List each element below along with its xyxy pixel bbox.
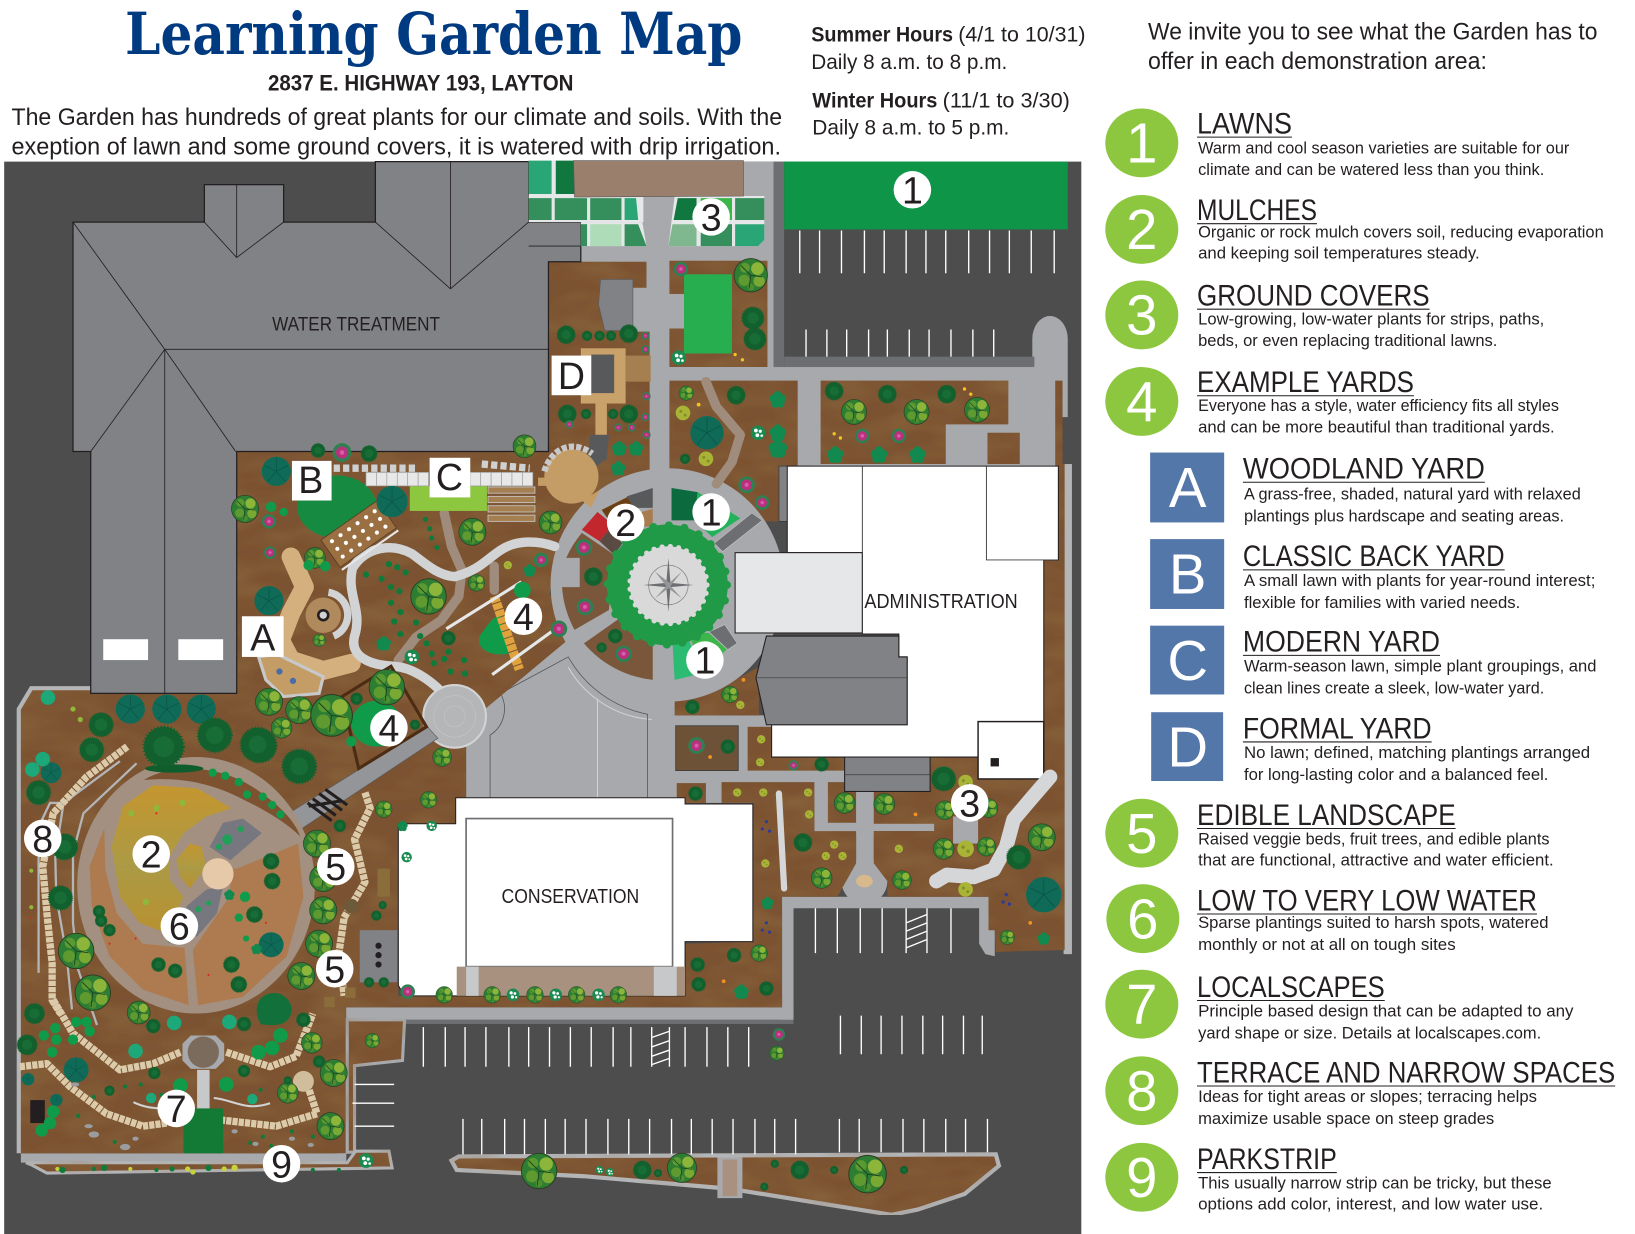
legend item: formal yard bbox=[1151, 712, 1590, 784]
legend item: lawns: 1 bbox=[1126, 112, 1157, 175]
legend item: parkstrip bbox=[1105, 1143, 1552, 1214]
map markers: numbers: 1 bbox=[902, 169, 923, 211]
map markers: numbers: 3 bbox=[701, 196, 722, 238]
map markers: numbers: 5 bbox=[324, 948, 345, 990]
plants: spiral garden surroundings bbox=[25, 690, 627, 1023]
hedge bbox=[145, 764, 203, 773]
building: administration: ADMINISTRATION bbox=[864, 591, 1018, 613]
map markers: numbers: 4 bbox=[513, 596, 534, 638]
map markers: numbers: 4 bbox=[379, 707, 399, 749]
stone edging bbox=[334, 464, 530, 468]
legend item: parkstrip: PARKSTRIP bbox=[1197, 1144, 1337, 1176]
winter hours: Daily 8 a.m. to 5 p.m. bbox=[812, 117, 1009, 140]
legend item: terrace and narrow spaces: 8 bbox=[1126, 1060, 1157, 1123]
yard 4 lawn and deck bbox=[342, 582, 553, 769]
map markers: numbers: 2 bbox=[141, 834, 162, 876]
map markers: letters bbox=[242, 355, 591, 659]
gray service block bbox=[324, 869, 397, 1007]
legend item: lawns bbox=[1105, 108, 1570, 179]
map panel bbox=[4, 161, 1081, 1234]
map markers: numbers: 7 bbox=[166, 1088, 187, 1130]
building: administration bbox=[735, 466, 1058, 791]
green ring bbox=[607, 525, 728, 645]
plaza lawns bbox=[672, 488, 740, 680]
legend item: parkstrip: options add color, interest, and low water use. bbox=[1198, 1196, 1543, 1214]
legend item: low water: monthly or not at all on tough sites bbox=[1198, 936, 1456, 954]
legend item: classic back yard: CLASSIC BACK YARD bbox=[1243, 541, 1505, 573]
summer hours: Summer Hours bbox=[811, 24, 953, 47]
gazebo localscape bbox=[30, 1035, 270, 1153]
legend item: low water: 6 bbox=[1127, 887, 1158, 950]
map markers: numbers: 5 bbox=[325, 846, 346, 888]
parking lines bbox=[352, 230, 1054, 1154]
building: conservation: CONSERVATION bbox=[502, 886, 639, 908]
plaza steps bbox=[709, 513, 762, 650]
map background: asphalt bbox=[4, 162, 1081, 1234]
stone paths bbox=[20, 747, 370, 1126]
legend item: woodland yard: WOODLAND YARD bbox=[1243, 454, 1485, 486]
plaza beds bbox=[562, 533, 653, 680]
legend item: localscapes: 7 bbox=[1126, 973, 1157, 1036]
legend item: mulches: MULCHES bbox=[1197, 195, 1317, 227]
legend item: mulches bbox=[1105, 195, 1604, 264]
address: 2837 E. HIGHWAY 193, LAYTON bbox=[268, 71, 574, 96]
map markers: numbers: 1 bbox=[694, 640, 715, 682]
map markers: numbers: 8 bbox=[32, 818, 53, 860]
plants: yard gardens bbox=[231, 325, 651, 783]
legend item: low water: LOW TO VERY LOW WATER bbox=[1197, 885, 1537, 917]
legend item: parkstrip: This usually narrow strip can be tricky, but these bbox=[1198, 1175, 1552, 1193]
compass rose bbox=[630, 546, 707, 624]
legend item: lawns: climate and can be watered less than you think. bbox=[1198, 161, 1544, 179]
paver circle bbox=[423, 685, 486, 748]
legend item: mulches: 2 bbox=[1126, 198, 1157, 261]
intro paragraph bbox=[11, 104, 782, 160]
legend item: example yards: and can be more beautiful than traditional yards. bbox=[1198, 419, 1555, 437]
building: water treatment bbox=[73, 162, 581, 693]
north lawn panel bbox=[684, 274, 732, 353]
legend item: woodland yard: A grass-free, shaded, natural yard with relaxed bbox=[1244, 485, 1581, 503]
gravel beds bbox=[210, 819, 262, 860]
pump house bbox=[599, 279, 633, 331]
legend item: edible landscape: that are functional, attractive and water efficient. bbox=[1198, 851, 1554, 869]
courtyard detail lines bbox=[568, 667, 652, 798]
legend item: edible landscape: EDIBLE LANDSCAPE bbox=[1197, 800, 1456, 832]
building: water treatment: WATER TREATMENT bbox=[272, 314, 440, 336]
yard A bbox=[259, 592, 348, 697]
map markers: numbers bbox=[24, 169, 989, 1185]
legend item: parkstrip: 9 bbox=[1126, 1146, 1157, 1209]
legend item: classic back yard: flexible for families with varied needs. bbox=[1244, 594, 1520, 612]
top crescent bed bbox=[144, 769, 300, 836]
map markers: letters: D bbox=[558, 355, 585, 397]
center paver bbox=[202, 858, 234, 889]
legend intro: We invite you to see what the Garden has to bbox=[1148, 19, 1597, 46]
legend item: localscapes: LOCALSCAPES bbox=[1197, 972, 1385, 1004]
legend item: localscapes bbox=[1105, 970, 1574, 1043]
legend item: terrace and narrow spaces bbox=[1105, 1056, 1615, 1128]
plants: localscape and parkstrip bbox=[17, 993, 908, 1193]
title: Learning Garden Map bbox=[125, 0, 742, 68]
legend item: modern yard: clean lines create a sleek, low-water yard. bbox=[1244, 679, 1544, 697]
plants: north and east beds bbox=[672, 259, 1061, 999]
winter hours: Winter Hours bbox=[812, 89, 937, 112]
legend item: modern yard: MODERN YARD bbox=[1243, 627, 1440, 659]
building: conservation bbox=[398, 798, 753, 996]
legend item: example yards: Everyone has a style, water efficiency fits all styles bbox=[1198, 397, 1559, 415]
map markers: letters: B bbox=[298, 459, 323, 501]
median crosswalk bbox=[717, 1157, 742, 1198]
map markers: numbers: 1 bbox=[701, 492, 722, 534]
spiral garden bbox=[77, 757, 315, 1014]
legend item: low water bbox=[1106, 884, 1548, 954]
legend item: edible landscape: 5 bbox=[1126, 802, 1157, 865]
intro paragraph: The Garden has hundreds of great plants for our climate and soils. With the bbox=[11, 104, 782, 131]
legend item: lawns: LAWNS bbox=[1197, 108, 1292, 140]
plaza bbox=[551, 468, 784, 702]
map markers: letters: A bbox=[250, 617, 275, 659]
legend item: woodland yard: plantings plus hardscape and seating areas. bbox=[1244, 507, 1564, 525]
legend item: woodland yard bbox=[1150, 453, 1581, 525]
summer hours: Daily 8 a.m. to 8 p.m. bbox=[811, 51, 1007, 74]
pergola bbox=[308, 789, 347, 821]
legend intro bbox=[1148, 19, 1597, 75]
summer hours: (4/1 to 10/31) bbox=[958, 24, 1085, 47]
legend item: localscapes: yard shape or size. Details at localscapes.com. bbox=[1198, 1025, 1541, 1043]
legend item: classic back yard bbox=[1150, 539, 1595, 612]
legend item: edible landscape bbox=[1105, 799, 1554, 869]
legend item: example yards: EXAMPLE YARDS bbox=[1197, 367, 1414, 399]
legend item: modern yard: C bbox=[1167, 629, 1208, 692]
garden outer border bbox=[19, 688, 91, 1153]
east garden: dry stream bbox=[779, 777, 1050, 888]
terrace walls bbox=[39, 761, 137, 1025]
legend item: classic back yard: B bbox=[1169, 542, 1206, 605]
winter hours bbox=[812, 89, 1070, 140]
legend item: low water: Sparse plantings suited to harsh spots, watered bbox=[1198, 914, 1548, 932]
map markers: numbers: 2 bbox=[615, 502, 636, 544]
legend intro: offer in each demonstration area: bbox=[1148, 48, 1487, 75]
yard D: patio and stone bbox=[538, 348, 651, 508]
legend item: ground covers: 3 bbox=[1126, 284, 1157, 347]
legend item: terrace and narrow spaces: Ideas for tight areas or slopes; terracing helps bbox=[1198, 1088, 1537, 1106]
map markers: letters: C bbox=[436, 456, 463, 498]
legend item: edible landscape: Raised veggie beds, fruit trees, and edible plants bbox=[1198, 831, 1549, 849]
legend item: lawns: Warm and cool season varieties are suitable for our bbox=[1198, 139, 1570, 157]
winter hours: (11/1 to 3/30) bbox=[943, 89, 1070, 112]
concrete walkways bbox=[21, 162, 1072, 1163]
legend item: ground covers bbox=[1105, 281, 1544, 350]
legend item: ground covers: beds, or even replacing traditional lawns. bbox=[1198, 332, 1497, 350]
meadow mulch bbox=[112, 785, 231, 933]
plaza ring bbox=[551, 468, 784, 702]
legend item: mulches: and keeping soil temperatures steady. bbox=[1198, 245, 1480, 263]
legend item: formal yard: for long-lasting color and a balanced feel. bbox=[1244, 766, 1548, 784]
legend item: mulches: Organic or rock mulch covers soil, reducing evaporation bbox=[1198, 224, 1604, 242]
mulch samples bbox=[582, 488, 653, 555]
legend item: modern yard bbox=[1150, 626, 1596, 697]
lower left bed bbox=[90, 828, 189, 1005]
legend item: formal yard: FORMAL YARD bbox=[1243, 713, 1432, 745]
north ground cover beds bbox=[529, 161, 764, 246]
legend item: modern yard: Warm-season lawn, simple plant groupings, and bbox=[1244, 658, 1596, 676]
lawn 1 parking bbox=[784, 162, 1068, 229]
diagonal walkway bbox=[225, 727, 438, 870]
legend item: terrace and narrow spaces: maximize usable space on steep grades bbox=[1198, 1110, 1494, 1128]
map markers: numbers: 3 bbox=[959, 782, 980, 824]
summer hours bbox=[811, 24, 1085, 74]
lower right bed bbox=[193, 844, 303, 1005]
legend item: ground covers: Low-growing, low-water plants for strips, paths, bbox=[1198, 310, 1544, 328]
legend item: formal yard: No lawn; defined, matching plantings arranged bbox=[1244, 744, 1590, 762]
legend item: woodland yard: A bbox=[1169, 456, 1207, 519]
intro paragraph: exeption of lawn and some ground covers, it is watered with drip irrigation. bbox=[11, 133, 781, 160]
legend item: localscapes: Principle based design that can be adapted to any bbox=[1198, 1003, 1574, 1021]
map markers: numbers: 6 bbox=[169, 906, 190, 948]
legend item: formal yard: D bbox=[1167, 715, 1208, 778]
outer ring path bbox=[77, 757, 315, 1014]
legend item: ground covers: GROUND COVERS bbox=[1197, 281, 1430, 313]
legend item: example yards bbox=[1105, 367, 1559, 437]
yard B: lawn and deck bbox=[297, 475, 399, 571]
legend item: example yards: 4 bbox=[1126, 370, 1157, 433]
paths bbox=[280, 382, 740, 691]
yard C: lawn, pavers, trellis bbox=[366, 472, 535, 521]
legend item: classic back yard: A small lawn with plants for year-round interest; bbox=[1244, 572, 1595, 590]
garden beds: mulch bbox=[19, 261, 1065, 1215]
entry detail bbox=[856, 816, 978, 887]
map markers: numbers: 9 bbox=[271, 1143, 292, 1185]
